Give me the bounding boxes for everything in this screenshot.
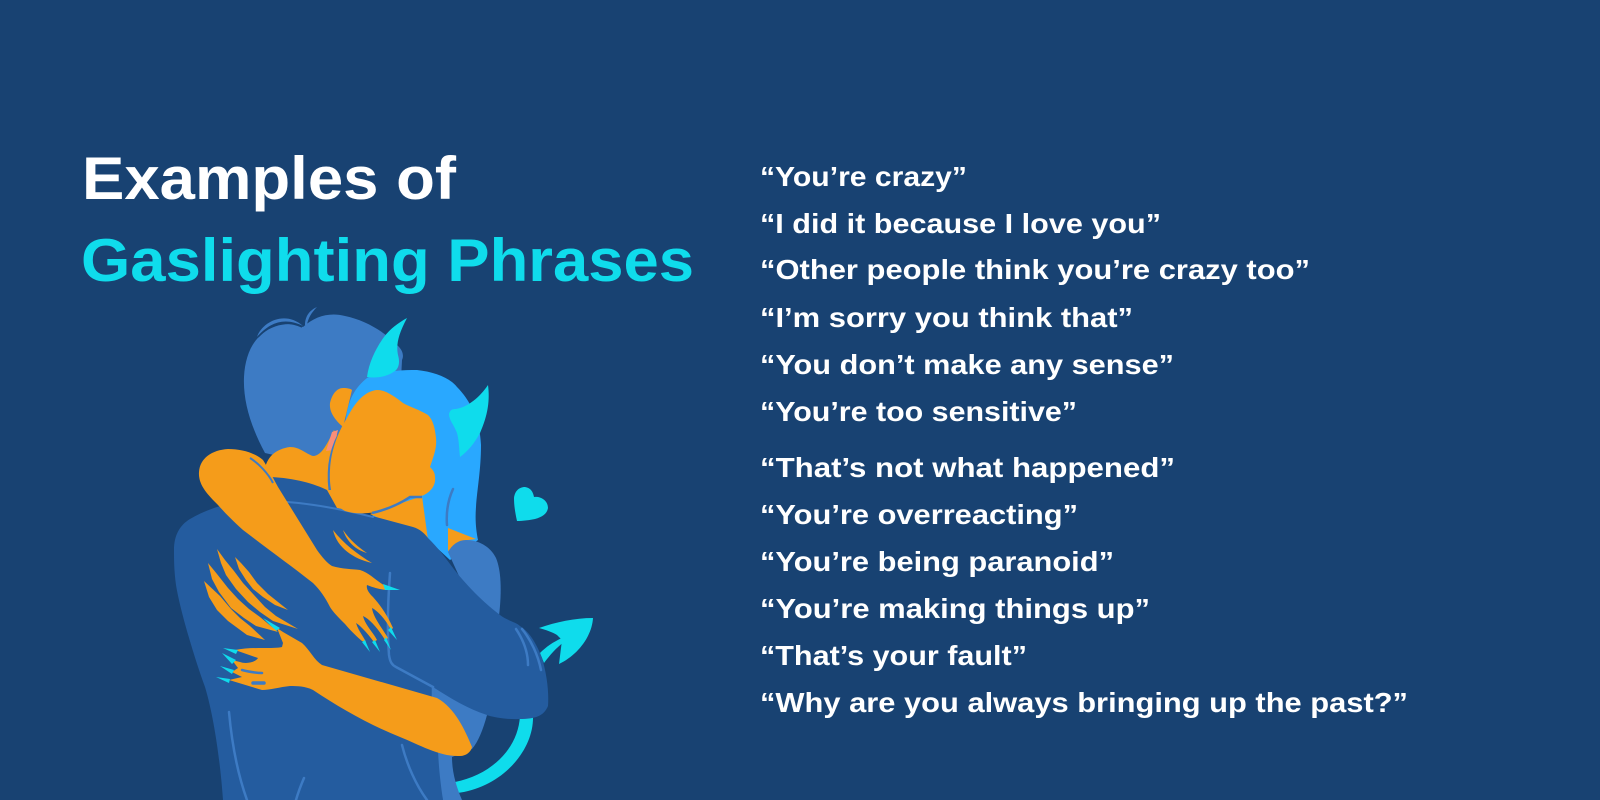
woman neck and chest bbox=[265, 388, 476, 551]
man head bbox=[244, 307, 403, 470]
woman lower arm and hand bbox=[229, 628, 472, 756]
phrases group two: “You’re being paranoid” bbox=[760, 546, 1114, 577]
title: Examples of bbox=[82, 145, 457, 212]
phrases group two bbox=[760, 452, 1408, 718]
icon: heart bbox=[514, 487, 548, 521]
phrases group one: “Other people think you’re crazy too” bbox=[760, 254, 1310, 285]
man body bbox=[174, 477, 548, 800]
man under arm bbox=[433, 687, 487, 800]
phrases group one: “I’m sorry you think that” bbox=[760, 302, 1133, 333]
scratch marks bbox=[204, 530, 372, 640]
phrases group two: “That’s not what happened” bbox=[760, 452, 1175, 483]
title bbox=[81, 145, 694, 294]
illustration: embracing couple bbox=[174, 307, 593, 800]
phrases group one: “I did it because I love you” bbox=[760, 208, 1161, 239]
clothing fold lines bbox=[229, 489, 541, 800]
phrases group one: “You’re too sensitive” bbox=[760, 396, 1077, 427]
title: Gaslighting Phrases bbox=[81, 227, 694, 294]
phrases group one bbox=[760, 161, 1310, 427]
man upper arm bbox=[448, 540, 501, 616]
phrases group two: “That’s your fault” bbox=[760, 640, 1027, 671]
woman face bbox=[329, 390, 436, 513]
phrases group two: “You’re overreacting” bbox=[760, 499, 1078, 530]
phrases group one: “You’re crazy” bbox=[760, 161, 967, 192]
woman hair bbox=[345, 370, 481, 560]
icon: left horn bbox=[367, 318, 407, 377]
claws bbox=[216, 584, 400, 683]
phrases group two: “Why are you always bringing up the past?” bbox=[760, 687, 1408, 718]
icon: devil tail bbox=[455, 618, 593, 793]
woman upper arm and hand bbox=[199, 449, 393, 642]
icon: right horn bbox=[449, 385, 489, 457]
phrases group two: “You’re making things up” bbox=[760, 593, 1150, 624]
phrases group one: “You don’t make any sense” bbox=[760, 349, 1174, 380]
